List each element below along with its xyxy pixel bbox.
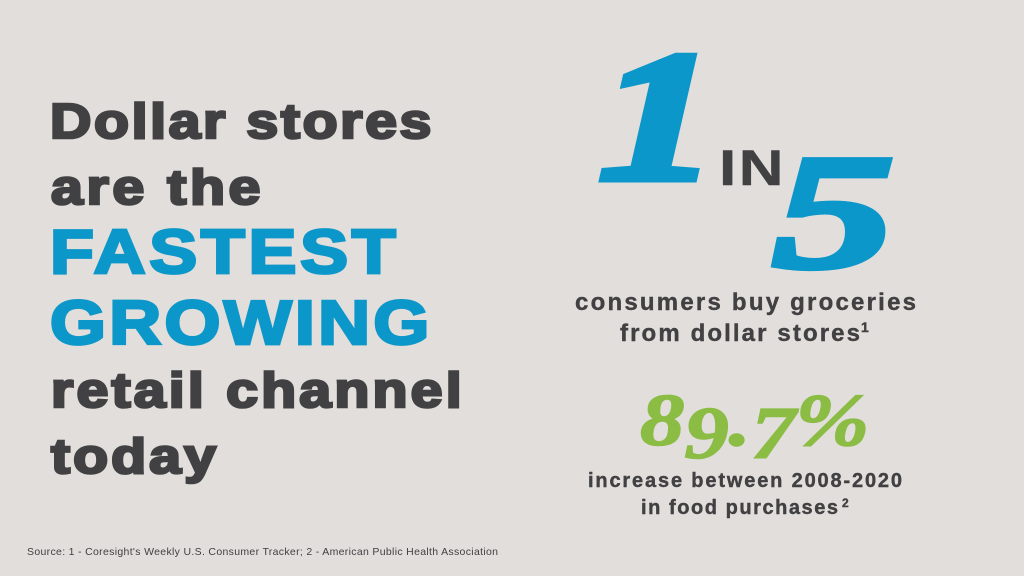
statistic: 1 in 5: IN xyxy=(719,140,783,196)
statistic: 89.7%: 7 xyxy=(751,392,799,474)
headline: are the xyxy=(51,161,260,215)
headline: retail channel xyxy=(51,364,462,418)
statistic: 1 in 5: 1 xyxy=(598,13,719,220)
caption: consumers buy groceries: consumers buy groceries xyxy=(575,289,916,316)
statistic: 89.7%: 9 xyxy=(684,392,729,474)
statistic: 1 in 5: 5 xyxy=(772,122,895,303)
caption: consumers buy groceries: from dollar stores xyxy=(620,320,860,347)
caption: increase in food purchases xyxy=(588,470,902,519)
headline: Dollar stores xyxy=(50,95,431,149)
caption: consumers buy groceries: 1 xyxy=(861,319,869,335)
caption: increase in food purchases: increase between 2008-2020 xyxy=(588,470,902,492)
caption: increase in food purchases: in food purchases xyxy=(641,497,838,519)
headline: GROWING xyxy=(50,289,429,358)
statistic: 89.7%: 8 xyxy=(640,379,684,461)
source note: Source: 1 - Coresight's Weekly U.S. Consumer Tracker; 2 - American Public Health Association xyxy=(27,546,498,558)
caption: increase in food purchases: 2 xyxy=(842,496,849,510)
statistic: 89.7%: % xyxy=(795,379,869,461)
headline: today xyxy=(51,430,216,484)
statistic: 1 in 5 xyxy=(598,13,895,303)
headline xyxy=(50,95,462,484)
caption: consumers buy groceries xyxy=(575,289,916,347)
statistic: 89.7%: . xyxy=(729,379,751,461)
headline: FASTEST xyxy=(50,218,396,287)
